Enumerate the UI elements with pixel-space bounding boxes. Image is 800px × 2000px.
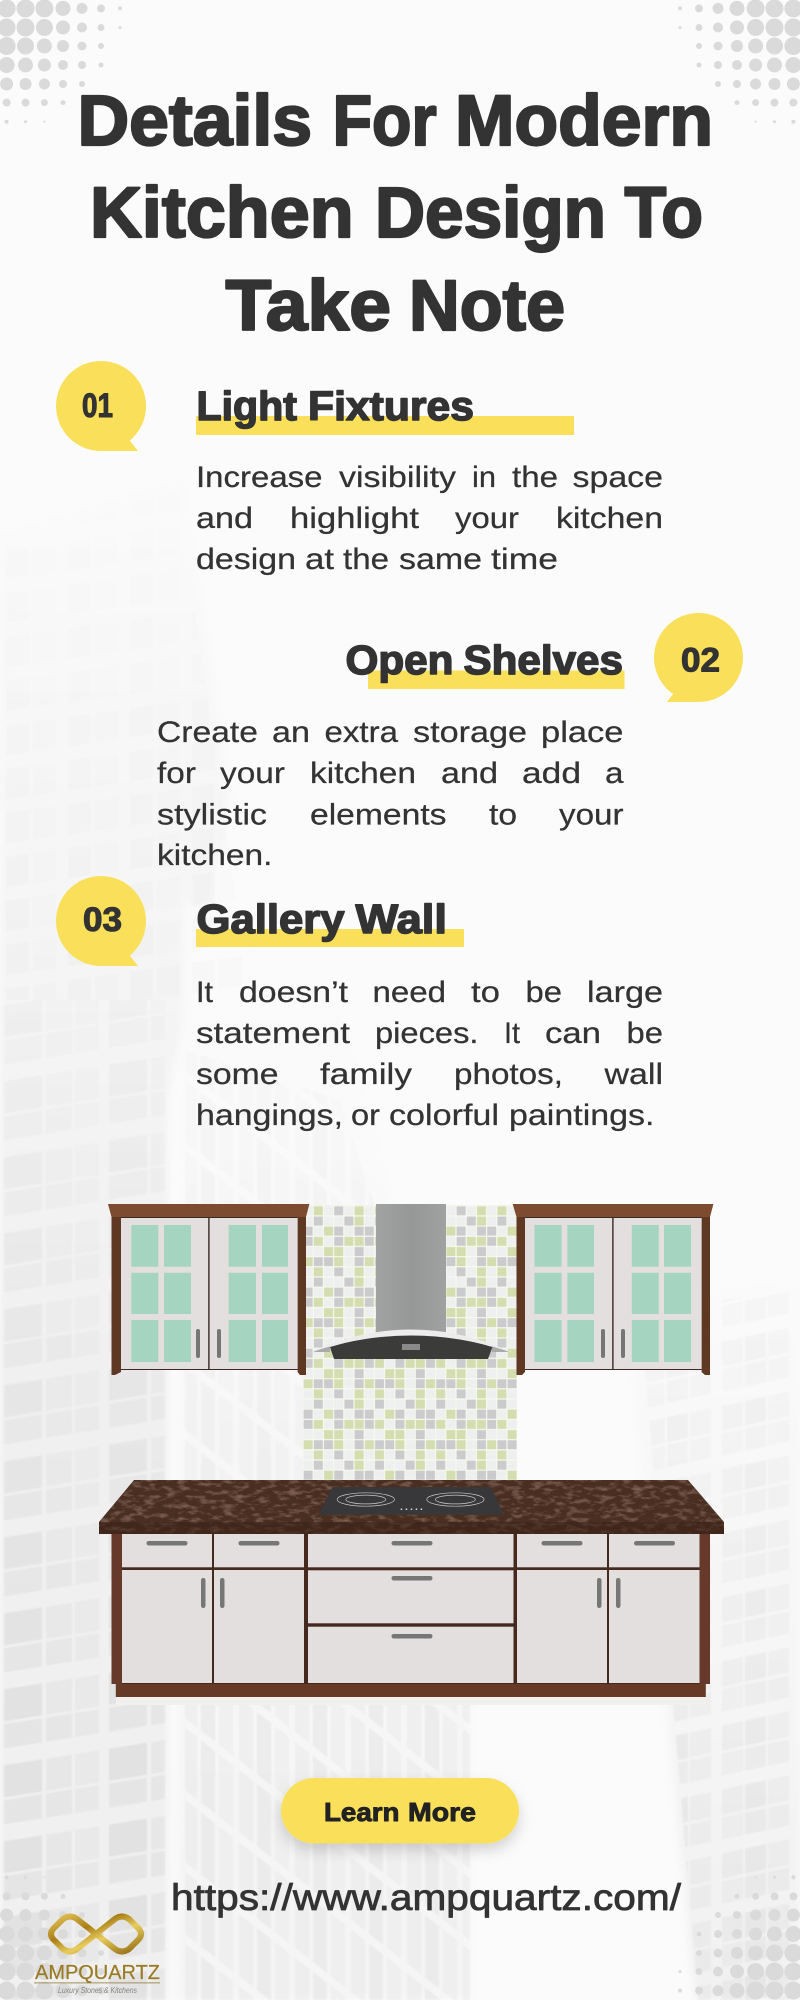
body text 01: the — [343, 543, 389, 576]
heading: Gallery Wall: Wall — [356, 896, 447, 942]
body text 03: doesn’t — [239, 976, 349, 1009]
heading: Light Fixtures: Light — [196, 383, 297, 429]
body text 01: your — [455, 502, 519, 535]
title: Design — [375, 174, 606, 253]
body text 03: pieces. — [375, 1017, 478, 1050]
title: Note — [409, 267, 565, 346]
body text 02: an — [272, 716, 310, 749]
title: Details — [78, 82, 312, 161]
background: faded building photo — [2, 855, 796, 2000]
body text 02: elements — [310, 798, 446, 832]
body text 03: It — [504, 1017, 521, 1050]
body text 03: can — [545, 1017, 601, 1050]
heading: Open Shelves: Shelves — [464, 637, 623, 683]
illustration: kitchen — [99, 1204, 724, 1705]
body text 02: extra — [324, 716, 398, 749]
heading: Light Fixtures: Fixtures — [308, 383, 474, 429]
base cabinet — [112, 1534, 710, 1705]
body text 03 — [196, 976, 663, 1132]
url text: https://www.ampquartz.com/ — [171, 1877, 682, 1918]
body text 01: and — [196, 502, 253, 535]
panel: 01 Light Fixtures — [56, 361, 663, 576]
body text 01: Increase — [196, 461, 322, 494]
badge 03: 03 — [83, 901, 122, 939]
body text 01: design — [196, 543, 296, 576]
body text 03: wall — [603, 1058, 663, 1091]
button: Learn More: More — [408, 1797, 476, 1827]
title: To — [624, 174, 703, 253]
badge 02: 02 — [681, 642, 720, 680]
badge 01 — [56, 361, 146, 451]
body text 03: photos, — [454, 1058, 563, 1091]
panel: 03 Gallery Wall — [56, 876, 663, 1132]
backsplash tiles — [303, 1205, 517, 1480]
body text 03: or — [351, 1099, 380, 1132]
body text 03: large — [587, 976, 663, 1009]
body text 03: hangings, — [196, 1099, 343, 1132]
body text 03: need — [372, 976, 446, 1009]
body text 03: family — [320, 1058, 412, 1091]
body text 01: same — [399, 543, 482, 576]
body text 02 — [157, 716, 624, 872]
body text 03: statement — [196, 1017, 351, 1050]
heading: Open Shelves: Open — [346, 637, 454, 683]
title: Take — [226, 267, 391, 346]
body text 03: be — [526, 976, 562, 1009]
logo: AMPQUARTZ: Luxury Stones & Kitchens — [58, 1986, 137, 1995]
body text 02: to — [489, 798, 517, 832]
logo: AMPQUARTZ — [34, 1916, 160, 1995]
countertop — [99, 1480, 724, 1534]
heading: Light Fixtures — [196, 383, 574, 435]
panel: 02 Open Shelves — [157, 613, 743, 872]
body text 02: your — [559, 798, 624, 832]
body text 01: highlight — [290, 502, 420, 535]
body text 02: your — [220, 757, 285, 790]
icon: gold infinity — [51, 1916, 141, 1952]
body text 02: storage — [413, 716, 527, 749]
body text 02: place — [541, 716, 624, 749]
body text 02: and — [441, 757, 498, 790]
body text 02: kitchen — [310, 757, 416, 790]
heading: Open Shelves — [346, 637, 624, 689]
badge 03 — [56, 876, 146, 966]
upper cabinet right — [513, 1204, 713, 1375]
cooktop — [319, 1487, 504, 1515]
body text 02: add — [522, 757, 581, 790]
title — [78, 82, 713, 346]
button: Learn More: Learn — [324, 1797, 400, 1827]
body text 03: colorful — [389, 1099, 499, 1132]
upper cabinet left — [108, 1204, 309, 1375]
body text 03: It — [196, 976, 214, 1009]
body text 01: the — [512, 461, 558, 494]
body text 01: visibility — [339, 461, 456, 494]
body text 03: paintings. — [509, 1099, 654, 1132]
body text 03: be — [626, 1017, 663, 1050]
body text 02: for — [157, 757, 196, 790]
title: Kitchen — [90, 174, 354, 253]
title: For — [333, 82, 437, 161]
heading: Gallery Wall — [196, 896, 464, 947]
body text 03: to — [471, 976, 500, 1009]
badge 01: 01 — [82, 387, 113, 425]
body text 01 — [196, 461, 663, 576]
body text 01: space — [572, 461, 663, 494]
body text 01: at — [305, 543, 335, 576]
title: Modern — [455, 82, 713, 161]
body text 01: kitchen — [556, 502, 663, 535]
body text 02: kitchen. — [157, 839, 272, 872]
body text 02: Create — [157, 716, 258, 749]
logo: AMPQUARTZ: AMPQUARTZ — [35, 1962, 160, 1984]
body text 02: a — [605, 757, 624, 790]
body text 03: some — [196, 1058, 278, 1091]
button: Learn More — [281, 1778, 519, 1844]
body text 01: time — [491, 543, 558, 576]
badge 02 — [654, 613, 743, 702]
body text 01: in — [472, 461, 496, 494]
body text 02: stylistic — [157, 798, 267, 832]
range hood — [309, 1204, 514, 1359]
heading: Gallery Wall: Gallery — [196, 896, 345, 942]
